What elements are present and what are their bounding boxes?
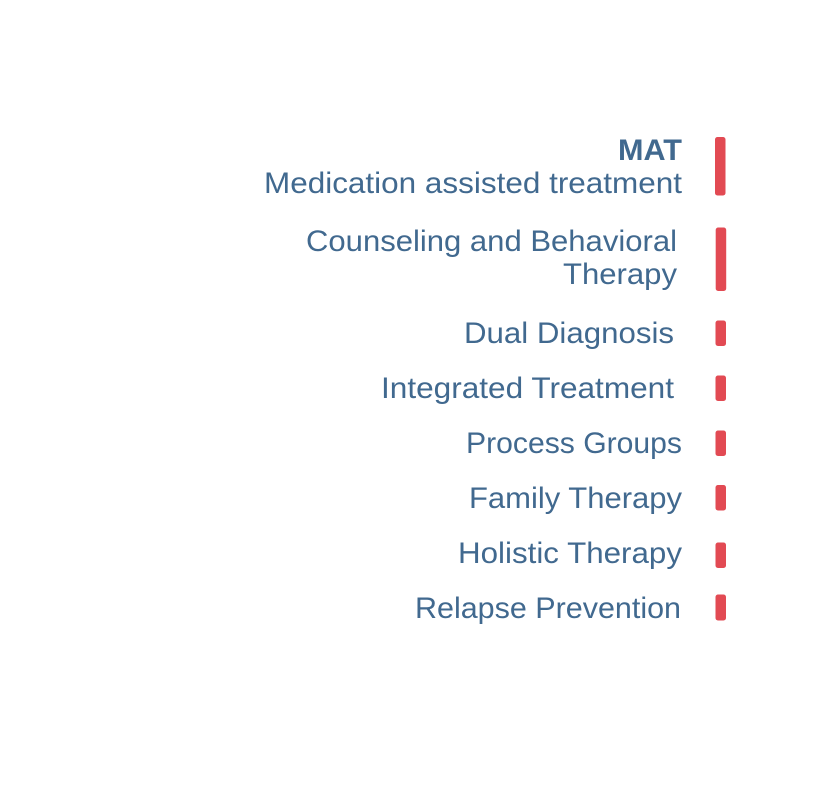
row: Family Therapy: Family Therapy: [469, 482, 682, 515]
row: MAT: [264, 134, 726, 200]
row: Counseling and Behavioral Therapy: [306, 225, 726, 291]
row: MAT: Medication assisted treatment: [264, 167, 683, 200]
row: Process Groups: Process Groups: [466, 427, 682, 460]
row: Integrated Treatment: Integrated Treatment: [381, 372, 675, 405]
row: Counseling and Behavioral Therapy: Therapy: [563, 258, 677, 291]
row: Dual Diagnosis: Dual Diagnosis: [464, 317, 674, 350]
row: Relapse Prevention: Relapse Prevention: [415, 592, 681, 625]
row: Counseling and Behavioral Therapy: Counseling and Behavioral: [306, 225, 677, 258]
row: Holistic Therapy: Holistic Therapy: [458, 537, 682, 570]
row: MAT: MAT: [618, 134, 682, 167]
